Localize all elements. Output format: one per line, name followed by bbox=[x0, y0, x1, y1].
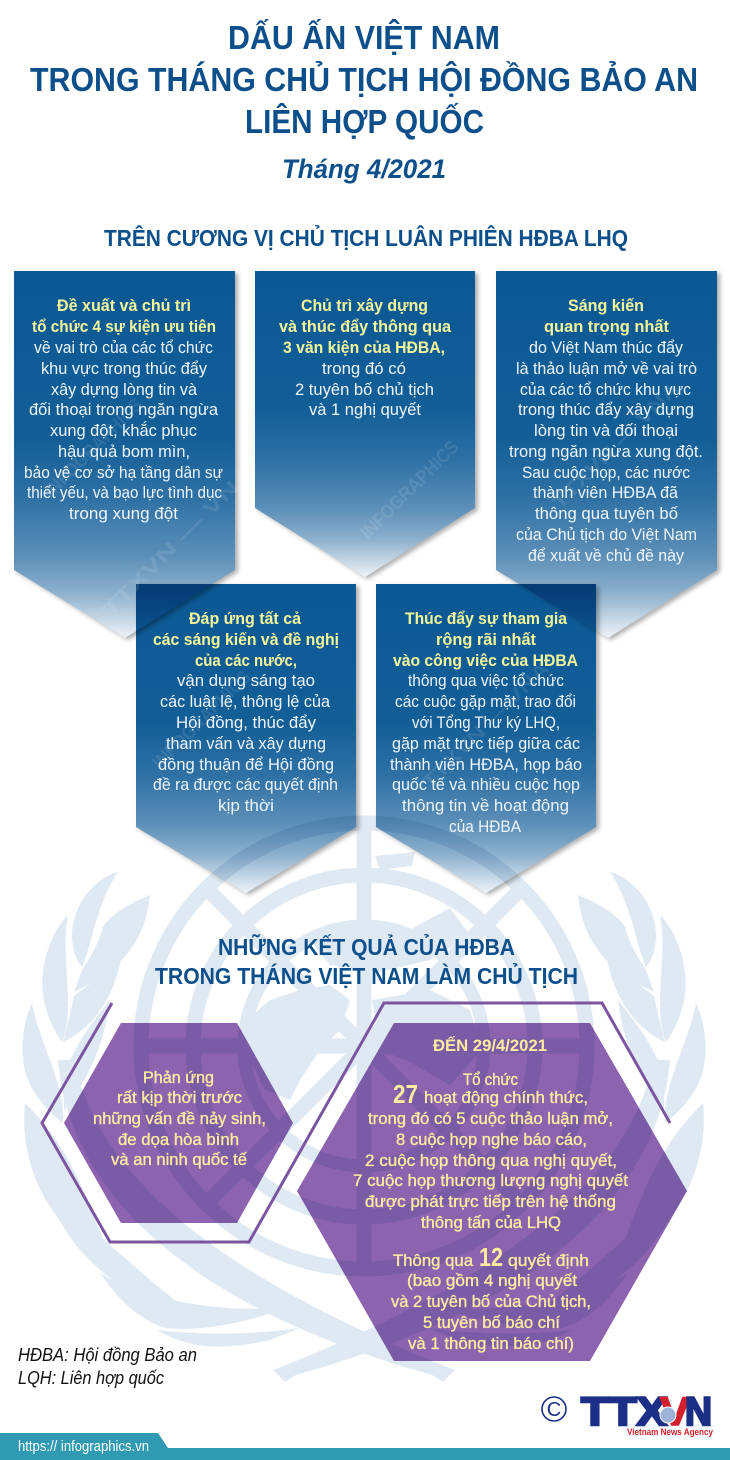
title: LIÊN HỢP QUỐC bbox=[245, 102, 484, 141]
panel: rapid response hexagon: và an ninh quốc tế bbox=[111, 1151, 247, 1169]
abbreviation notes bbox=[18, 1345, 197, 1388]
panel: results hexagon: 5 tuyên bố báo chí bbox=[423, 1314, 560, 1332]
panel: results hexagon: được phát trực tiếp trên hệ thống bbox=[365, 1193, 616, 1211]
panel: fourth initiative: đồng thuận để Hội đồng bbox=[158, 756, 334, 774]
footer bar bbox=[0, 1433, 730, 1460]
panel: first initiative: Đề xuất và chủ trì bbox=[57, 297, 191, 315]
panel: fifth initiative bbox=[376, 584, 596, 893]
panel: fifth initiative: vào công việc của HĐBA bbox=[393, 652, 578, 670]
panel: first initiative: bảo vệ cơ sở hạ tầng dân sự bbox=[24, 464, 223, 482]
panel: third initiative: để xuất về chủ đề này bbox=[528, 547, 685, 565]
panel: rapid response hexagon: những vấn đề nảy sinh, bbox=[93, 1110, 266, 1128]
logo: TTXVN: V bbox=[660, 1390, 690, 1434]
panel: rapid response hexagon bbox=[64, 1023, 293, 1223]
figure: 12 decisions: 12 bbox=[479, 1242, 503, 1272]
panel: second initiative: và 1 nghị quyết bbox=[309, 401, 421, 419]
panel: fifth initiative: Thúc đẩy sự tham gia bbox=[405, 610, 568, 628]
panel: results hexagon: 7 cuộc họp thương lượng nghị quyết bbox=[353, 1172, 628, 1190]
globe continents bbox=[247, 852, 482, 1100]
panel: results hexagon: Thông qua bbox=[393, 1252, 474, 1270]
panel: fourth initiative: của các nước, bbox=[195, 652, 297, 670]
right olive branch bbox=[273, 872, 706, 1382]
panel: rapid response hexagon: Phản ứng bbox=[143, 1069, 214, 1087]
panel: first initiative: trong xung đột bbox=[69, 505, 178, 523]
panel: third initiative: quan trọng nhất bbox=[544, 318, 669, 336]
panel: third initiative: do Việt Nam thúc đẩy bbox=[529, 339, 684, 357]
title bbox=[30, 19, 698, 141]
left olive branch bbox=[22, 872, 455, 1382]
panel: fifth initiative: rộng rãi nhất bbox=[436, 631, 536, 649]
panel: third initiative: thành viên HĐBA đã bbox=[533, 484, 679, 502]
date subtitle: Tháng 4/2021 bbox=[282, 154, 446, 184]
figure: 27 activities: 27 bbox=[393, 1079, 418, 1109]
panel: rapid response hexagon: rất kịp thời trước bbox=[117, 1089, 242, 1107]
panel: results hexagon: hoạt động chính thức, bbox=[424, 1089, 588, 1107]
icon: copyright bbox=[542, 1397, 566, 1421]
section heading: results: NHỮNG KẾT QUẢ CỦA HĐBA bbox=[218, 932, 515, 960]
panel: fourth initiative: các sáng kiến và đề nghị bbox=[153, 631, 339, 649]
watermarks: TTXVN — VNA bbox=[549, 378, 684, 514]
panel: results hexagon: và 1 thông tin báo chí) bbox=[408, 1335, 574, 1353]
watermarks: TTXVN — VNA bbox=[419, 658, 554, 794]
panel: second initiative: 2 tuyên bố chủ tịch bbox=[295, 381, 434, 399]
panel: results hexagon: quyết định bbox=[508, 1252, 589, 1270]
panel: results hexagon: và 2 tuyên bố của Chủ tịch, bbox=[391, 1293, 591, 1311]
panel: second initiative: và thúc đẩy thông qua bbox=[279, 318, 452, 336]
panel: fourth initiative: vận dụng sáng tạo bbox=[177, 672, 315, 690]
panel: fourth initiative: kịp thời bbox=[218, 797, 274, 815]
panel: first initiative: hậu quả bom mìn, bbox=[58, 443, 190, 461]
abbreviation notes: HĐBA: Hội đồng Bảo an bbox=[18, 1345, 197, 1365]
panel: third initiative: là thảo luận mở về vai trò bbox=[516, 360, 697, 378]
panel: third initiative: thông qua tuyên bố bbox=[535, 505, 678, 523]
title: DẤU ẤN VIỆT NAM bbox=[228, 19, 500, 57]
panel: results hexagon: trong đó có 5 cuộc thảo luận mở, bbox=[368, 1110, 613, 1128]
logo: TTXVN: N bbox=[685, 1390, 712, 1434]
panel: fifth initiative: thông tin về hoạt động bbox=[402, 797, 569, 815]
panel: fifth initiative: của HĐBA bbox=[449, 818, 521, 836]
panel: results hexagon: (bao gồm 4 nghị quyết bbox=[407, 1272, 577, 1290]
hexagon outline bbox=[42, 1003, 670, 1242]
panel: fourth initiative: đề ra được các quyết định bbox=[153, 776, 338, 794]
panel: first initiative: khu vực trong thúc đẩy bbox=[41, 360, 208, 378]
panel: second initiative: 3 văn kiện của HĐBA, bbox=[283, 339, 445, 357]
panel: fifth initiative: với Tổng Thư ký LHQ, bbox=[412, 714, 560, 732]
panel: results hexagon bbox=[297, 1023, 687, 1361]
panel: third initiative bbox=[496, 271, 717, 638]
panel: fourth initiative: Hội đồng, thúc đẩy bbox=[176, 714, 317, 732]
panel: first initiative bbox=[14, 271, 235, 638]
panel: third initiative: Sau cuộc họp, các nước bbox=[522, 464, 690, 482]
logo: TTXVN: Vietnam News Agency bbox=[627, 1427, 714, 1438]
panel: first initiative: thiết yếu, và bạo lực tình dục bbox=[27, 484, 222, 502]
panel: results hexagon: 8 cuộc họp nghe báo cáo, bbox=[396, 1131, 587, 1149]
panel: third initiative: của Chủ tịch do Việt Nam bbox=[516, 526, 697, 544]
globe rings and spokes bbox=[134, 816, 594, 1276]
panel: third initiative: trong thúc đẩy xây dựng bbox=[518, 401, 694, 419]
watermarks: INFOGRAPHICS bbox=[357, 437, 463, 544]
watermarks: TTXVN — VNA bbox=[99, 461, 259, 622]
panel: fifth initiative: gặp mặt trực tiếp giữa các bbox=[392, 735, 580, 753]
section heading: results: TRONG THÁNG VIỆT NAM LÀM CHỦ TỊCH bbox=[155, 961, 578, 989]
panel: results hexagon: thông tấn của LHQ bbox=[421, 1214, 561, 1232]
panel: fifth initiative: các cuộc gặp mặt, trao đổi bbox=[395, 693, 576, 711]
panel: third initiative: trong ngăn ngừa xung đột. bbox=[509, 443, 703, 461]
panel: fifth initiative: thành viên HĐBA, họp báo bbox=[390, 756, 582, 774]
section heading: presidency: TRÊN CƯƠNG VỊ CHỦ TỊCH LUÂN PHIÊN HĐBA LHQ bbox=[104, 223, 628, 251]
panel: third initiative: lòng tin và đối thoại bbox=[534, 422, 678, 440]
UN emblem background bbox=[22, 816, 706, 1382]
watermarks: INFOGRAPHICS bbox=[41, 395, 147, 502]
panel: results hexagon: ĐẾN 29/4/2021 bbox=[433, 1036, 547, 1055]
panel: fifth initiative: thông qua việc tổ chức bbox=[408, 672, 564, 690]
panel: first initiative: xung đột, khắc phục bbox=[50, 421, 197, 440]
panel: third initiative: của các tổ chức khu vực bbox=[520, 381, 691, 399]
panel: fifth initiative: quốc tế và nhiều cuộc họp bbox=[392, 776, 580, 794]
section heading: results bbox=[155, 932, 578, 989]
logo: TTXVN bbox=[581, 1390, 714, 1438]
panel: second initiative: Chủ trì xây dựng bbox=[301, 297, 428, 315]
panel: third initiative: Sáng kiến bbox=[568, 297, 644, 315]
abbreviation notes: LQH: Liên hợp quốc bbox=[18, 1368, 164, 1388]
panel: first initiative: đối thoại trong ngăn ngừa bbox=[29, 401, 219, 419]
panel: rapid response hexagon: đe dọa hòa bình bbox=[118, 1131, 239, 1149]
watermarks: INFOGRAPHICS bbox=[149, 667, 255, 774]
icon: copyright: C bbox=[547, 1399, 561, 1421]
panel: first initiative: xây dựng lòng tin và bbox=[51, 381, 198, 399]
logo: TTXVN: TTX bbox=[581, 1390, 667, 1434]
panel: second initiative bbox=[255, 271, 475, 577]
panel: fourth initiative bbox=[136, 584, 356, 893]
panel: results hexagon: Tổ chức bbox=[463, 1071, 518, 1089]
panel: second initiative: trong đó có bbox=[322, 360, 406, 378]
panel: fourth initiative: Đáp ứng tất cả bbox=[189, 610, 302, 628]
watermarks bbox=[41, 378, 684, 794]
panel: first initiative: về vai trò của các tổ chức bbox=[34, 339, 213, 357]
panel: fourth initiative: các luật lệ, thông lệ của bbox=[160, 693, 331, 711]
panel: first initiative: tổ chức 4 sự kiện ưu tiên bbox=[32, 318, 216, 336]
panel: results hexagon: 2 cuộc họp thông qua nghị quyết, bbox=[365, 1152, 617, 1170]
footer bar: https:// infographics.vn bbox=[18, 1438, 149, 1455]
panel: fourth initiative: tham vấn và xây dựng bbox=[166, 735, 326, 753]
